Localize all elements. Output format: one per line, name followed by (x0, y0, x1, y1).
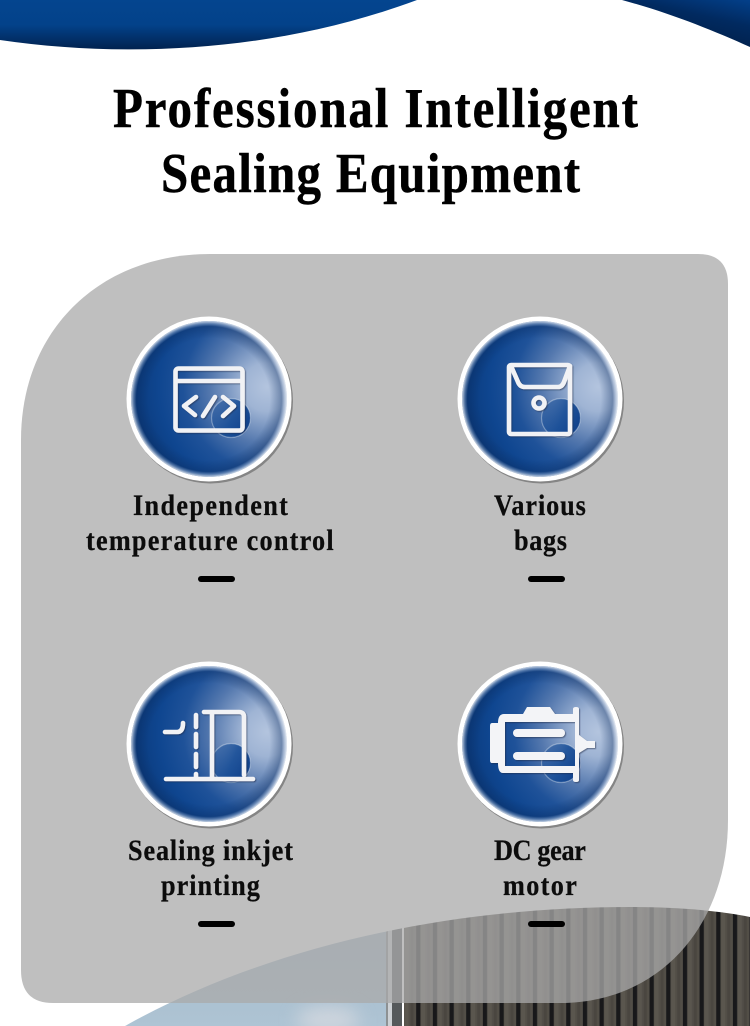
feature: independent temperature control (86, 316, 334, 582)
label: Independent (133, 489, 288, 522)
label (494, 489, 586, 557)
panel: features (21, 254, 728, 1003)
label (128, 834, 294, 902)
feature: dc gear motor (458, 662, 624, 927)
label: motor (503, 869, 577, 902)
dash (198, 576, 235, 582)
title: Professional Intelligent (113, 78, 638, 140)
icon: motor (458, 662, 624, 828)
feature: sealing inkjet printing (126, 662, 294, 927)
feature: various bags (458, 316, 624, 582)
background photo (120, 900, 750, 1026)
label: Sealing inkjet (128, 834, 294, 867)
label: Various (494, 489, 586, 522)
icon: bag (458, 316, 624, 484)
dash (528, 921, 565, 927)
label: printing (161, 869, 260, 902)
dash (528, 576, 565, 582)
dash (198, 921, 235, 927)
label (86, 489, 334, 557)
label: temperature control (86, 524, 334, 557)
icon: sealing door (126, 662, 293, 828)
title (113, 78, 638, 205)
icon: code window (126, 316, 293, 484)
label: DC gear (494, 834, 586, 867)
top wave band (0, 0, 750, 49)
label: bags (514, 524, 567, 557)
title: Sealing Equipment (161, 143, 581, 205)
label (494, 834, 586, 902)
